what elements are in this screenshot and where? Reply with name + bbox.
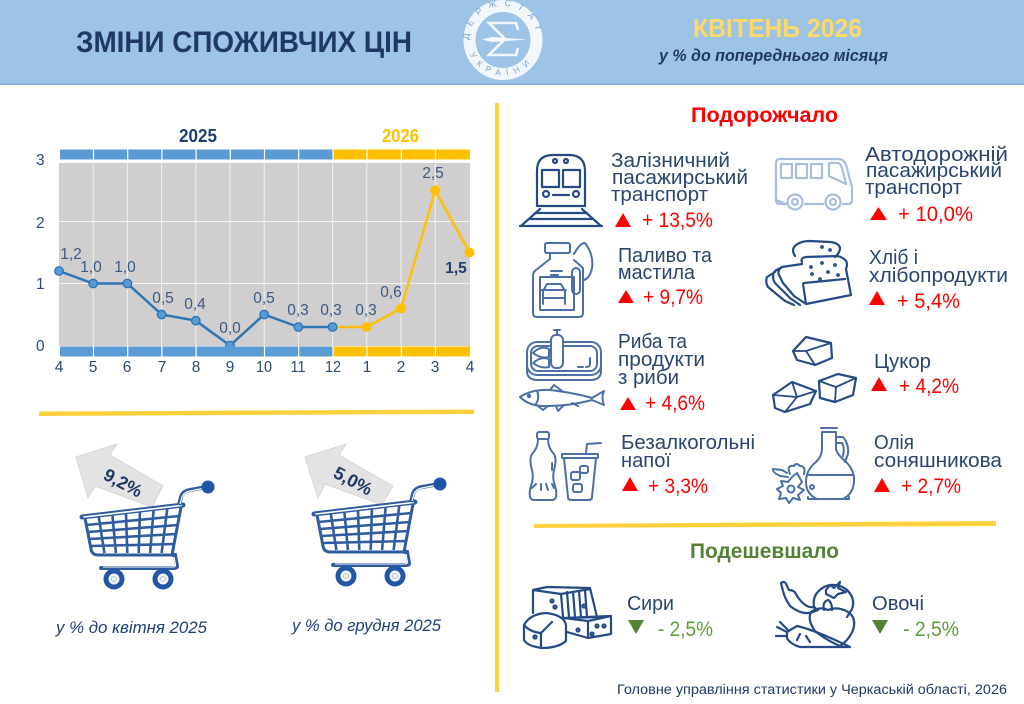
plot area: [59, 163, 470, 346]
icon: vegetables: [776, 582, 854, 647]
item: fuel and lubricants: [533, 243, 713, 317]
item: sunflower oil: + 2,7%: [901, 475, 961, 498]
item: fish: з риби: [618, 366, 679, 389]
item: sunflower oil: соняшникова: [874, 449, 1003, 472]
item: rail transport: [520, 149, 748, 232]
panel: annual change cart: [55, 444, 214, 637]
item: bread: + 5,4%: [897, 290, 960, 313]
item: soft drinks: напої: [621, 449, 671, 472]
item: vegetables: Овочі: [872, 592, 924, 615]
line chart: monthly price change: [36, 126, 475, 376]
data labels: 1,0: [114, 259, 136, 276]
y axis labels: 2: [36, 215, 45, 232]
item: road transport: + 10,0%: [898, 203, 973, 226]
caption: у % до грудня 2025: [291, 617, 442, 635]
data labels: 0,0: [219, 320, 241, 337]
2025 series line: [55, 267, 337, 356]
data labels: 0,6: [380, 284, 402, 301]
cart icon: [314, 478, 446, 584]
panel: change since December cart: [291, 444, 446, 635]
item: sugar: + 4,2%: [899, 375, 959, 398]
arrow up: [305, 444, 393, 505]
heading: price rises: Подорожчало: [691, 104, 838, 127]
icon: oil jar and flower: [773, 428, 854, 503]
item: fish: + 4,6%: [645, 392, 705, 415]
item: soft drinks: + 3,3%: [648, 475, 708, 498]
item: bread: хлібопродукти: [869, 264, 1008, 287]
x axis labels: 4: [466, 359, 475, 376]
x axis labels: 11: [290, 359, 306, 376]
item: sunflower oil: [773, 428, 1003, 503]
item: sugar: [773, 337, 959, 412]
value 9,2%: 9,2%: [100, 465, 146, 501]
item: road transport: Автодорожній: [865, 143, 1008, 166]
header band: [0, 0, 1024, 85]
logo: Держстат України: УКРАЇНИ: [470, 52, 530, 76]
item: rail transport: Залізничний: [611, 149, 730, 172]
item: road transport: пасажирський: [866, 159, 1002, 182]
item: road transport: [776, 143, 1008, 226]
y axis labels: 3: [36, 152, 45, 169]
subtitle: у % до попереднього місяця: [658, 46, 888, 65]
icon: bread slices: [766, 241, 851, 305]
item: fish: продукти: [618, 348, 705, 371]
y axis labels: 0: [36, 338, 45, 355]
item: sugar: Цукор: [874, 350, 931, 373]
icon: canister: [533, 243, 592, 317]
item: fuel and lubricants: Паливо та: [618, 244, 713, 267]
icon: cheese: [524, 587, 611, 648]
year label 2026: 2026: [382, 126, 419, 146]
item: vegetables: - 2,5%: [903, 618, 959, 641]
item: fish: Риба та: [618, 330, 688, 353]
x axis labels: 7: [158, 359, 166, 376]
caption: у % до квітня 2025: [55, 619, 208, 637]
icon: train: [520, 155, 602, 226]
data labels: 0,3: [320, 302, 342, 319]
x axis labels: 10: [256, 359, 272, 376]
data labels: 0,5: [253, 290, 275, 307]
item: rail transport: транспорт: [611, 183, 709, 206]
item: fuel and lubricants: + 9,7%: [643, 286, 703, 309]
x axis labels: 5: [89, 359, 97, 376]
item: rail transport: + 13,5%: [642, 209, 713, 232]
logo: Держстат України: [462, 0, 542, 80]
icon: sugar cubes: [773, 337, 856, 412]
source note: Головне управління статистики у Черкаській області, 2026: [617, 682, 1007, 697]
top band: [60, 149, 470, 160]
x axis labels: 9: [226, 359, 234, 376]
item: road transport: транспорт: [865, 176, 963, 199]
year label 2025: 2025: [179, 126, 217, 146]
divider: under chart: [39, 410, 474, 416]
heading: price falls: Подешевшало: [690, 540, 839, 563]
data labels: 1,2: [60, 246, 82, 263]
item: bread: Хліб і: [869, 246, 918, 269]
y axis labels: 1: [36, 276, 45, 293]
data labels: 0,3: [287, 302, 309, 319]
x axis labels: 8: [192, 359, 200, 376]
item: soft drinks: Безалкогольні: [621, 431, 755, 454]
2026 series line: [333, 186, 474, 332]
divider: above price falls: [534, 521, 996, 528]
arrow up: [76, 444, 163, 507]
item: cheese: - 2,5%: [658, 618, 713, 641]
item: cheese: [524, 587, 713, 648]
x axis labels: [55, 359, 475, 376]
data labels: 0,3: [355, 302, 377, 319]
x axis labels: 6: [123, 359, 131, 376]
x axis labels: 1: [363, 359, 371, 376]
item: bread: [766, 241, 1008, 313]
data labels: 2,5: [422, 165, 444, 182]
data labels: 0,4: [184, 296, 206, 313]
x axis labels: 12: [325, 359, 341, 376]
bottom band: [60, 346, 470, 357]
item: rail transport: пасажирський: [612, 166, 748, 189]
y axis labels: [36, 152, 45, 355]
item: fuel and lubricants: мастила: [618, 261, 696, 284]
icon: bus: [776, 159, 852, 210]
x axis labels: 4: [55, 359, 64, 376]
item: vegetables: [776, 582, 959, 647]
item: sunflower oil: Олія: [874, 431, 914, 454]
x axis labels: 3: [431, 359, 439, 376]
data labels: 1,0: [80, 259, 102, 276]
x axis labels: 2: [397, 359, 405, 376]
cart icon: [82, 480, 214, 587]
value 5,0%: 5,0%: [330, 463, 376, 499]
item: fish: [520, 330, 705, 415]
data labels: 1,5: [445, 260, 467, 277]
divider: vertical: [495, 103, 499, 692]
icon: bottle and cup: [530, 432, 601, 500]
data labels: [60, 165, 467, 337]
item: cheese: Сири: [627, 592, 674, 615]
title: ЗМІНИ СПОЖИВЧИХ ЦІН: [76, 26, 412, 59]
month heading: КВІТЕНЬ 2026: [693, 13, 862, 43]
item: soft drinks: [530, 431, 755, 500]
icon: fish can and fish: [520, 330, 604, 411]
data labels: 0,5: [152, 290, 174, 307]
